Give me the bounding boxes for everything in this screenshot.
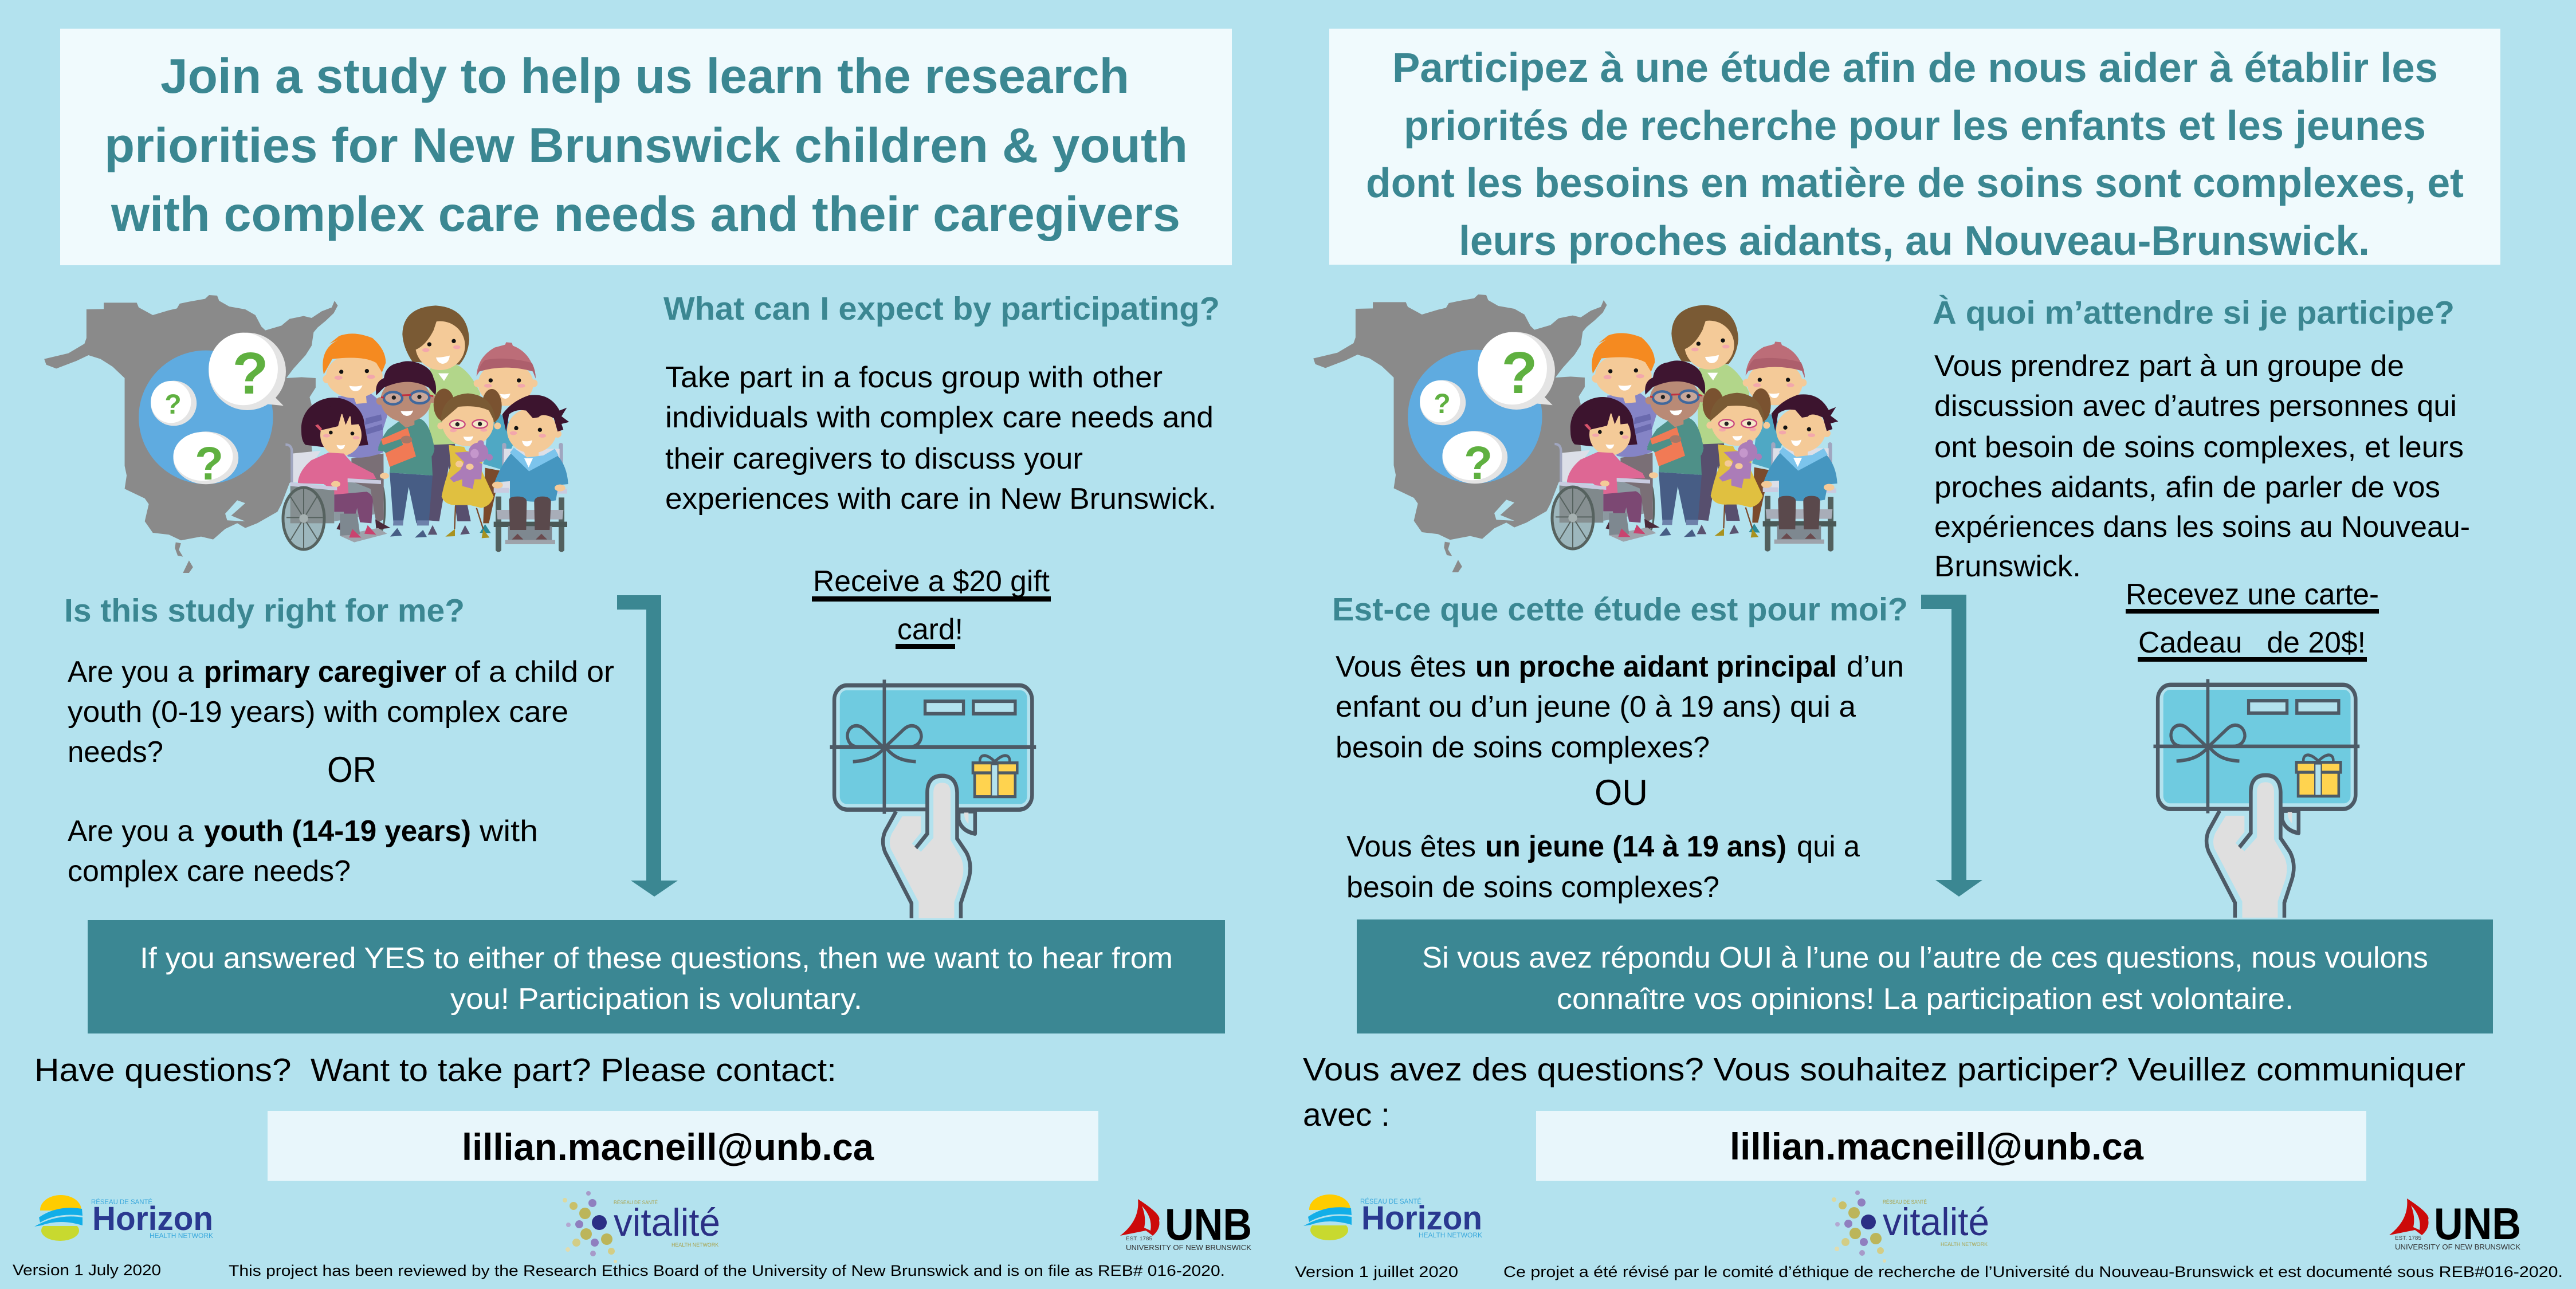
text block: focus group description: Take part in a focus group with other	[665, 361, 1163, 394]
logo: Horizon Health Network: Horizon	[92, 1200, 213, 1237]
footer: ethics statement: Ce projet a été révisé par le comité d’éthique de recherche de l’Université du Nouveau-Brunswick et est documenté sous REB#016-2020.	[1503, 1263, 2563, 1280]
text block: focus group description: individuals with complex care needs and	[665, 401, 1214, 434]
logo: Vitalité Health Network: HEALTH NETWORK	[1941, 1241, 1988, 1247]
icon: hand holding gift card	[830, 679, 1036, 918]
illustration: New Brunswick map with question bubbles: ?	[164, 390, 182, 420]
panel: English flyer	[13, 29, 1252, 1279]
text block: eligibility questions: d’un	[1847, 650, 1904, 683]
text block: focus group description: experiences with care in New Brunswick.	[665, 482, 1216, 516]
logo: Horizon Health Network: HEALTH NETWORK	[1419, 1231, 1482, 1239]
text block: eligibility questions: besoin de soins complexes?	[1346, 871, 1719, 904]
logo: Vitalité Health Network	[563, 1191, 720, 1263]
logo: Vitalité Health Network	[1832, 1190, 1989, 1263]
illustration: children and caregiver group	[1552, 305, 1838, 552]
callout: gift card offer: Recevez une carte-	[2126, 578, 2379, 611]
title banner	[1329, 29, 2500, 265]
title banner: with complex care needs and their caregivers	[111, 187, 1180, 242]
logo: University of New Brunswick: UNIVERSITY OF NEW BRUNSWICK	[2395, 1243, 2520, 1251]
text block: eligibility questions: youth (14-19 years)	[204, 815, 471, 848]
text block: focus group description	[1934, 349, 2470, 583]
heading: what to expect: What can I expect by participating?	[663, 290, 1220, 327]
text block: focus group description: expériences dans les soins au Nouveau-	[1934, 510, 2470, 544]
banner: call to action	[1357, 919, 2493, 1033]
logo: University of New Brunswick: EST. 1785	[1126, 1236, 1152, 1241]
banner: call to action	[88, 920, 1225, 1033]
banner: call to action: you! Participation is voluntary.	[450, 983, 862, 1016]
footer: version: Version 1 July 2020	[13, 1262, 161, 1279]
banner: call to action: If you answered YES to either of these questions, then we want to hear from	[140, 942, 1173, 975]
text block: eligibility questions: Are you a	[68, 815, 194, 848]
callout: gift card offer: card!	[897, 613, 963, 646]
illustration: New Brunswick map with question bubbles: ?	[195, 438, 223, 490]
text block: eligibility questions: OR	[327, 750, 376, 790]
callout: gift card offer	[812, 565, 1051, 649]
contact email box	[1536, 1111, 2366, 1181]
logo: Horizon Health Network: Horizon	[1361, 1200, 1482, 1237]
arrow	[617, 595, 678, 897]
text block: eligibility questions: complex care needs?	[68, 855, 351, 888]
banner: call to action: connaître vos opinions! La participation est volontaire.	[1557, 983, 2294, 1016]
title banner	[60, 29, 1232, 265]
text block: focus group description: Brunswick.	[1934, 550, 2081, 583]
illustration: New Brunswick map with question bubbles: ?	[1464, 437, 1493, 489]
text block: focus group description: their caregivers to discuss your	[665, 442, 1083, 475]
logo: University of New Brunswick	[1120, 1199, 1252, 1252]
text block: eligibility questions: of a child or	[454, 655, 614, 689]
text: contact prompt: Have questions? Want to take part? Please contact:	[34, 1052, 837, 1088]
contact email box	[268, 1111, 1098, 1181]
heading: eligibility: Est-ce que cette étude est pour moi?	[1332, 591, 1908, 628]
heading: eligibility: Is this study right for me?	[64, 592, 465, 629]
logo: Horizon Health Network: RÉSEAU DE SANTÉ	[1360, 1197, 1421, 1205]
panel: French flyer	[1295, 29, 2563, 1280]
footer: ethics statement: This project has been reviewed by the Research Ethics Board of the University of New Brunswick and is on file as REB# 016-2020.	[229, 1262, 1225, 1279]
text block: focus group description: Vous prendrez part à un groupe de	[1934, 349, 2404, 383]
illustration: New Brunswick map with question bubbles	[44, 295, 338, 573]
title banner: priorités de recherche pour les enfants et les jeunes	[1404, 103, 2426, 149]
illustration: New Brunswick map with question bubbles: ?	[1434, 389, 1451, 419]
callout: gift card offer: Receive a $20 gift	[813, 565, 1050, 598]
text block: focus group description: proches aidants, afin de parler de vos	[1934, 471, 2440, 504]
contact email box: lillian.macneill@unb.ca	[462, 1126, 874, 1168]
text block: eligibility questions: un proche aidant principal	[1475, 650, 1837, 683]
text block: eligibility questions: OU	[1595, 773, 1648, 813]
logo: Vitalité Health Network: vitalité	[614, 1201, 720, 1244]
logo: Vitalité Health Network: vitalité	[1883, 1200, 1989, 1244]
text: contact prompt: Vous avez des questions? Vous souhaitez participer? Veuillez communiquer	[1303, 1051, 2465, 1088]
callout: gift card offer	[2126, 578, 2379, 662]
title banner: leurs proches aidants, au Nouveau-Brunswick.	[1459, 218, 2370, 264]
logo: University of New Brunswick: EST. 1785	[2395, 1235, 2421, 1241]
text block: eligibility questions: with	[479, 815, 538, 848]
text block: eligibility questions: qui a	[1797, 830, 1860, 863]
text: contact prompt	[1303, 1051, 2465, 1133]
illustration: New Brunswick map with question bubbles: ?	[1502, 340, 1537, 406]
text block: eligibility questions: enfant ou d’un jeune (0 à 19 ans) qui a	[1336, 690, 1856, 724]
logo: Horizon Health Network	[1303, 1194, 1482, 1240]
title banner: dont les besoins en matière de soins sont complexes, et	[1366, 160, 2464, 206]
text block: focus group description	[665, 361, 1216, 516]
icon: hand holding gift card	[2153, 679, 2359, 918]
arrow	[1921, 595, 1982, 897]
logo: Vitalité Health Network: RÉSEAU DE SANTÉ	[614, 1200, 658, 1205]
text: contact prompt: avec :	[1303, 1097, 1390, 1133]
illustration: children and caregiver group	[283, 305, 569, 552]
callout: gift card offer: Cadeau de 20$!	[2138, 626, 2366, 659]
title banner: priorities for New Brunswick children & youth	[104, 119, 1188, 173]
text block: focus group description: ont besoin de soins complexes, et leurs	[1934, 431, 2464, 464]
text block: eligibility questions	[68, 655, 614, 888]
text block: focus group description: discussion avec d’autres personnes qui	[1934, 390, 2457, 423]
title banner: Join a study to help us learn the research	[160, 49, 1129, 104]
illustration: New Brunswick map with question bubbles: ?	[233, 340, 268, 406]
footer: version: Version 1 juillet 2020	[1295, 1263, 1458, 1280]
logo: Horizon Health Network: HEALTH NETWORK	[150, 1232, 213, 1240]
logo: University of New Brunswick: UNB	[2434, 1198, 2521, 1249]
logo: Vitalité Health Network: RÉSEAU DE SANTÉ	[1883, 1199, 1927, 1205]
logo: University of New Brunswick: UNB	[1165, 1199, 1252, 1249]
text block: eligibility questions: un jeune (14 à 19 ans)	[1485, 830, 1786, 863]
logo: Horizon Health Network: RÉSEAU DE SANTÉ	[91, 1197, 152, 1206]
text block: eligibility questions: Vous êtes	[1346, 830, 1476, 863]
title banner: Participez à une étude afin de nous aider à établir les	[1392, 45, 2438, 91]
text block: eligibility questions: Vous êtes	[1336, 650, 1466, 683]
logo: Vitalité Health Network: HEALTH NETWORK	[672, 1242, 718, 1248]
contact email box: lillian.macneill@unb.ca	[1730, 1125, 2144, 1168]
banner: call to action: Si vous avez répondu OUI à l’une ou l’autre de ces questions, nous voulons	[1422, 941, 2428, 974]
text block: eligibility questions: primary caregiver	[204, 655, 446, 689]
logo: University of New Brunswick	[2389, 1198, 2521, 1251]
text block: eligibility questions	[1336, 650, 1904, 904]
text block: eligibility questions: Are you a	[68, 655, 194, 689]
logo: Horizon Health Network	[34, 1195, 213, 1241]
text block: eligibility questions: needs?	[68, 736, 163, 769]
illustration: New Brunswick map with question bubbles	[1313, 294, 1607, 572]
text block: eligibility questions: youth (0-19 years) with complex care	[68, 695, 568, 729]
logo: University of New Brunswick: UNIVERSITY OF NEW BRUNSWICK	[1126, 1243, 1251, 1252]
text block: eligibility questions: besoin de soins complexes?	[1336, 731, 1710, 764]
heading: what to expect: À quoi m’attendre si je participe?	[1933, 294, 2455, 331]
